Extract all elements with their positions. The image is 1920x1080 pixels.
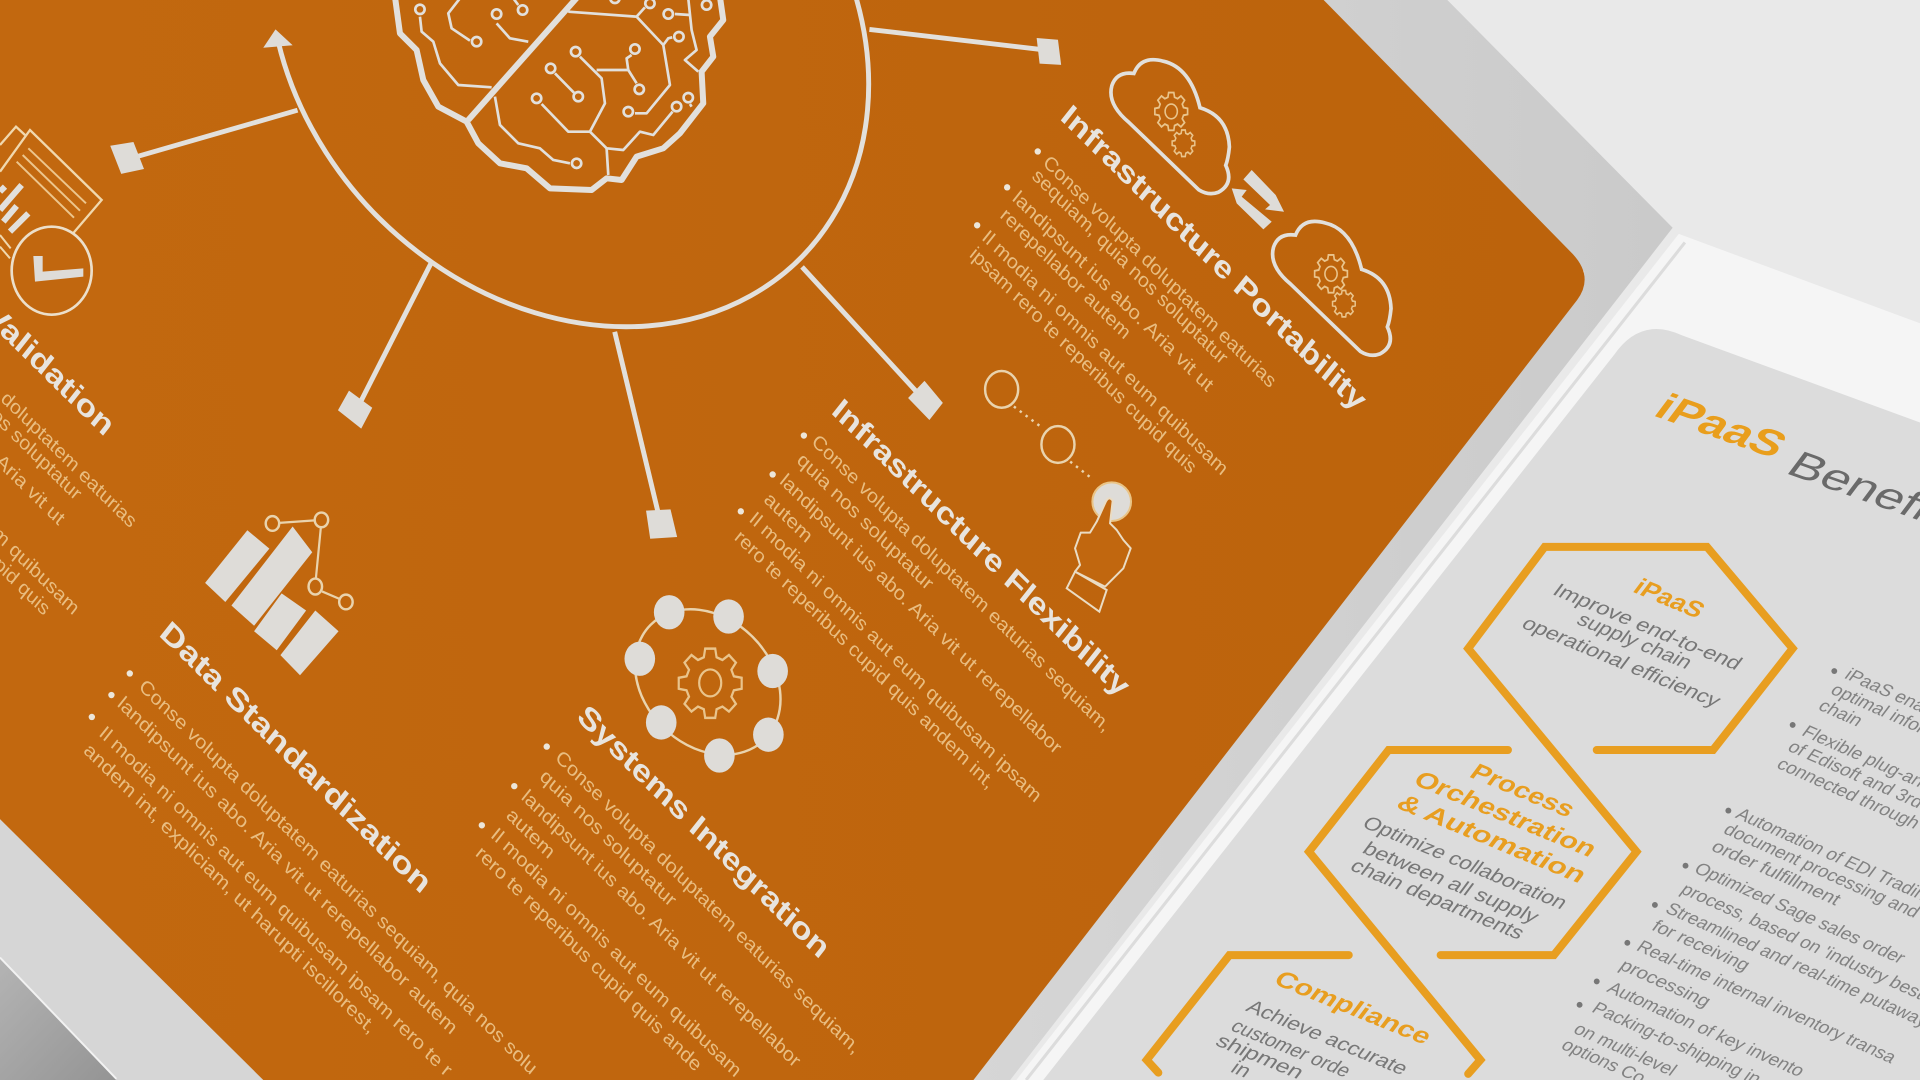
systems integration list: Conse volupta doluptatem eaturias sequiam, [551, 747, 864, 1059]
data standardization list: Conse volupta doluptatem eaturias sequiam, quia nos solu [135, 676, 541, 1080]
left page edge highlight [0, 958, 116, 1079]
benefit bullets: process orchestration: Optimized Sage sales order [1690, 858, 1910, 967]
benefit bullets: process orchestration: Real-time internal inventory transa [1633, 936, 1902, 1067]
benefit bullets: process orchestration: Automation of key invento [1604, 978, 1809, 1080]
benefit bullets: process orchestration: order fulfillment [1708, 836, 1846, 909]
infrastructure flexibility bullets [738, 432, 807, 515]
hexagon text: compliance: Achieve accurate [1242, 997, 1412, 1079]
infrastructure flexibility list [730, 431, 1114, 807]
infrastructure flexibility list: quia nos soluptatur [793, 449, 937, 595]
infrastructure portability list: ipsam rero te reperibus cupid quis [965, 243, 1200, 478]
icon: circuit brain [395, 0, 723, 190]
title: iPaaS Benefits [1646, 386, 1920, 541]
icon: gear with orbiting nodes [606, 580, 810, 784]
spoke: systems integration [615, 332, 677, 539]
data standardization list: Il modia ni omnis aut eum quibusam ipsam rero te r [95, 722, 456, 1080]
hexagon text: iPaaS: operational efficiency [1517, 613, 1726, 712]
heading: data standardization: Data Standardization [154, 615, 438, 900]
benefit bullets: process orchestration: processing [1616, 955, 1716, 1011]
infrastructure portability bullets [974, 148, 1041, 228]
infrastructure portability list [965, 152, 1280, 480]
dark table corner [0, 958, 116, 1080]
hub arc [278, 0, 869, 327]
hexagon text: process orchestration [1346, 760, 1602, 944]
hexagon text: process orchestration: Optimize collaboration [1358, 813, 1571, 914]
hexagon text: process orchestration: between all supply [1358, 839, 1544, 928]
benefit bullets: iPaaS [1773, 664, 1920, 832]
block: validation [0, 290, 140, 620]
systems integration list: rero te reperibus cupid quis ande [472, 842, 705, 1076]
systems integration list: autem [502, 804, 559, 864]
left folder page margin [0, 819, 263, 1080]
hexagon text: iPaaS [1517, 575, 1746, 712]
title: iPaaS Benefits: iPaaS [1646, 386, 1796, 466]
hexagon text: process orchestration: Process [1465, 760, 1580, 822]
block: systems integration [472, 698, 864, 1080]
icon: document and check [0, 127, 102, 315]
systems integration bullets [479, 743, 550, 828]
benefit bullets: iPaaS: chain [1815, 695, 1867, 730]
arc arrowhead [263, 29, 293, 48]
systems integration list: Il modia ni omnis aut eum quibusam [487, 824, 745, 1080]
infrastructure portability list: landipsunt ius abo. Aria vit ut [1008, 187, 1218, 397]
data standardization list: landipsunt ius abo. Aria vit ut rerepellabor autem [113, 693, 461, 1039]
hexagon text: iPaaS: iPaaS [1628, 575, 1710, 623]
hexagon text: iPaaS: Improve end-to-end [1548, 580, 1746, 674]
data standardization list: andem int, expliciam, ut harupti iscillorest, [80, 739, 380, 1039]
benefit bullets: process orchestration: for receiving [1648, 916, 1755, 974]
systems integration list: quia nos soluptatur [536, 766, 680, 912]
fold crease [1026, 242, 1685, 1080]
hexagon text: compliance [1211, 966, 1437, 1080]
infrastructure flexibility list: landipsunt ius abo. Aria vit ut rerepellabor [776, 470, 1065, 759]
heading: infrastructure portability: Infrastructure Portability [1055, 98, 1373, 418]
systems integration list [472, 747, 864, 1080]
hexagon text: compliance: Compliance [1269, 966, 1437, 1050]
infrastructure flexibility list: rero te reperibus cupid quis andem int, [730, 526, 998, 794]
hexagon text: process orchestration: Orchestration [1408, 767, 1602, 862]
icon: data bars with nodes [205, 513, 353, 675]
infrastructure portability list: Conse volupta doluptatem eaturias [1039, 152, 1280, 393]
right folder page [1016, 234, 1920, 1080]
heading: infrastructure flexibility: Infrastructure Flexibility [826, 392, 1137, 704]
infrastructure flexibility list: Il modia ni omnis aut eum quibusam ipsam [745, 508, 1045, 807]
hexagon chain [1147, 547, 1793, 1074]
icon: touch path with hand [985, 371, 1131, 612]
spoke: validation [110, 110, 298, 174]
hexagon text: iPaaS: supply chain [1572, 610, 1696, 673]
folder grey band [955, 0, 1673, 1080]
systems integration list: landipsunt ius abo. Aria vit ut rerepellabor [517, 786, 804, 1072]
icon: cloud to cloud transfer [1111, 60, 1391, 355]
block: data standardization [80, 615, 541, 1080]
block: infrastructure flexibility [730, 392, 1137, 807]
spoke: data standardization [338, 263, 431, 429]
infrastructure flexibility list: Conse volupta doluptatem eaturias sequiam, [808, 431, 1114, 737]
heading: systems integration: Systems Integration [571, 698, 836, 965]
panel: central diagram [110, 0, 1061, 539]
benefit bullets: process orchestration: document processing and [1720, 819, 1920, 921]
block: infrastructure portability [965, 98, 1373, 480]
right grey card [1043, 329, 1920, 1080]
benefit bullets: process orchestration [1558, 804, 1920, 1080]
hexagon text: process orchestration: & Automation [1391, 790, 1592, 888]
benefit bullets: process orchestration: on multi-level [1570, 1019, 1681, 1079]
spoke: infrastructure portability [869, 29, 1061, 65]
infrastructure portability list: rerepellabor autem [996, 204, 1134, 344]
spoke: infrastructure flexibility [802, 267, 943, 420]
hexagon text: compliance: shipmen [1211, 1031, 1308, 1080]
infrastructure portability list: Il modia ni omnis aut eum quibusam [978, 226, 1232, 480]
panel: iPaaS benefits [1147, 386, 1920, 1080]
infrastructure portability list: sequiam, quia nos soluptatur [1028, 165, 1231, 369]
validation list [0, 290, 140, 620]
hexagon text: process orchestration: chain departments [1346, 856, 1529, 944]
infrastructure flexibility list: autem [760, 488, 816, 548]
data standardization bullets [89, 670, 133, 720]
